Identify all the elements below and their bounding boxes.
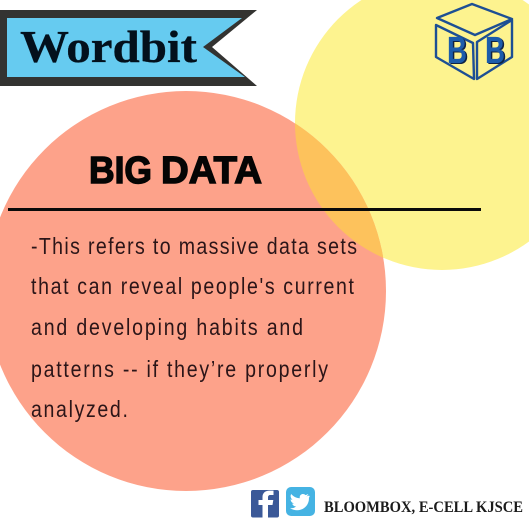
icon: twitter bbox=[286, 487, 315, 516]
circle overlap area bbox=[295, 124, 384, 258]
body text: and developing habits and bbox=[31, 315, 303, 340]
body text: that can reveal people's current bbox=[31, 274, 354, 299]
body text: patterns -- if they’re properly bbox=[31, 357, 328, 382]
logo letters: B bbox=[486, 31, 506, 73]
logo: BB cube bbox=[436, 4, 512, 79]
logo letters: B bbox=[448, 31, 468, 73]
logo letters: B bbox=[447, 30, 467, 72]
icon: facebook bbox=[251, 490, 279, 518]
body text: -This refers to massive data sets bbox=[31, 234, 357, 259]
heading: BIG DATA: DATA bbox=[161, 150, 262, 192]
heading: BIG DATA bbox=[89, 150, 262, 192]
logo letters bbox=[447, 30, 506, 73]
divider line bbox=[8, 208, 481, 211]
facebook glyph bbox=[258, 491, 274, 518]
banner: Wordbit bbox=[0, 10, 257, 86]
body text bbox=[31, 234, 357, 422]
logo letters: B bbox=[485, 30, 505, 72]
banner title: Wordbit bbox=[20, 21, 198, 72]
heading: BIG DATA: BIG bbox=[89, 150, 152, 192]
salmon circle bbox=[0, 91, 386, 491]
twitter bird bbox=[290, 494, 310, 510]
body text: analyzed. bbox=[31, 397, 128, 422]
yellow background circle bbox=[295, 0, 529, 270]
